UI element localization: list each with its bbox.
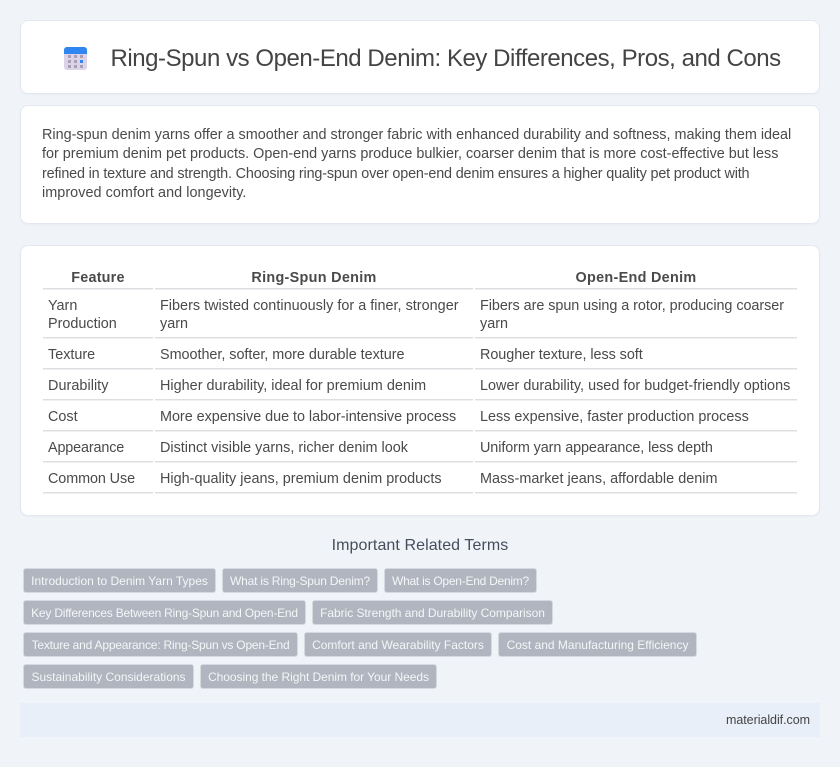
icon: calendar [64,47,87,70]
comparison table: Uniform yarn appearance, less depth [480,440,713,456]
comparison table: Cost [48,409,78,425]
comparison table: Durability [48,378,108,394]
related term chips: Introduction to Denim Yarn Types [31,574,208,588]
related term chips: Choosing the Right Denim for Your Needs [208,670,429,684]
intro text: for premium denim pet products. Open-end yarns produce bulkier, coarser denim that is more cost-effective but less [42,146,778,162]
related term chips: Texture and Appearance: Ring-Spun vs Open-End [32,638,289,652]
comparison table: Lower durability, used for budget-friendly options [480,378,790,394]
comparison table: Yarn [48,298,77,314]
comparison table: Appearance [48,440,124,456]
comparison table: Smoother, softer, more durable texture [160,347,404,363]
comparison table: Mass-market jeans, affordable denim [480,471,718,487]
comparison table: Less expensive, faster production process [480,409,749,425]
comparison table: yarn [160,316,188,332]
comparison table: Higher durability, ideal for premium denim [160,378,426,394]
comparison table: Fibers are spun using a rotor, producing coarser [480,298,784,314]
related term chips: What is Open-End Denim? [392,574,529,588]
footer source text: materialdif.com [726,713,810,727]
comparison table panel [20,245,820,516]
comparison table: Common Use [48,471,135,487]
comparison table: Ring-Spun Denim [251,270,377,286]
comparison table [43,270,797,494]
comparison table: High-quality jeans, premium denim products [160,471,442,487]
related term chips: Comfort and Wearability Factors [312,638,484,652]
comparison table: Feature [71,270,125,286]
comparison table: Distinct visible yarns, richer denim look [160,440,408,456]
intro text [42,127,791,201]
title: Ring-Spun vs Open-End Denim: Key Differences, Pros, and Cons [110,45,781,72]
comparison table: Fibers twisted continuously for a finer, stronger [160,298,459,314]
intro paragraph panel [20,105,820,224]
comparison table: Rougher texture, less soft [480,347,643,363]
related term chips: Cost and Manufacturing Efficiency [507,638,688,652]
related terms heading: Important Related Terms [332,537,508,554]
related term chips [23,568,697,689]
related term chips: Fabric Strength and Durability Comparison [320,606,545,620]
comparison table: yarn [480,316,508,332]
related term chips: Key Differences Between Ring-Spun and Open-End [31,606,298,620]
footer bar [20,703,820,737]
intro text: Ring-spun denim yarns offer a smoother and stronger fabric with enhanced durability and softness, making them ideal [42,127,791,143]
comparison table: Texture [48,347,95,363]
intro text: improved comfort and longevity. [42,185,246,201]
related term chips: What is Ring-Spun Denim? [230,574,370,588]
comparison table: More expensive due to labor-intensive process [160,409,456,425]
header panel [20,20,820,94]
comparison table: Open-End Denim [576,270,696,286]
related term chips: Sustainability Considerations [31,670,186,684]
comparison table: Production [48,316,117,332]
intro text: refined in texture and strength. Choosing ring-spun over open-end denim ensures a higher quality pet product with [42,166,749,182]
